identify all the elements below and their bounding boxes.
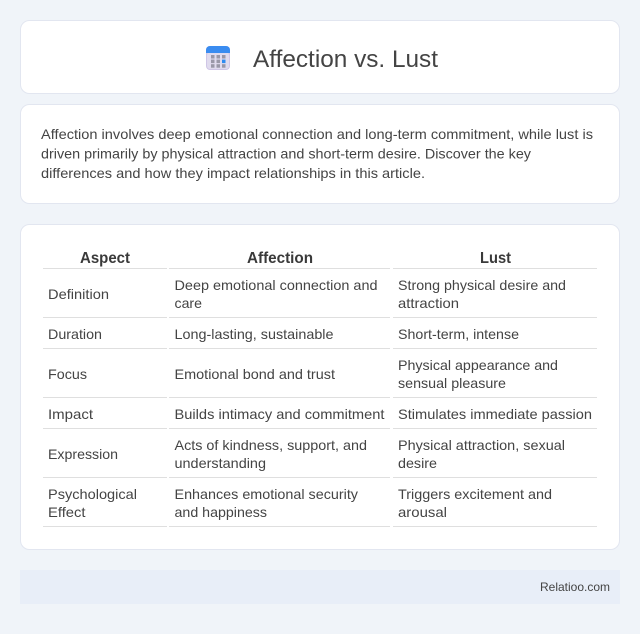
footer: [20, 570, 620, 604]
row: Focus: Focus: [48, 366, 87, 382]
text block: introduction: differences and how they impact relationships in this article.: [41, 165, 425, 181]
row: Focus: Emotional bond and trust: [174, 366, 335, 382]
row: Psychological Effect: arousal: [398, 504, 447, 520]
row: Impact: Stimulates immediate passion: [398, 406, 592, 422]
row: Definition: Strong physical desire and: [398, 277, 566, 293]
row: Expression: [48, 437, 565, 471]
text block: introduction: Affection involves deep emotional connection and long-term commitment, while lust is: [41, 126, 593, 142]
row: Psychological Effect: Effect: [48, 504, 86, 520]
panel: header: [20, 20, 620, 94]
row: Duration: Duration: [48, 326, 102, 342]
row: Duration: Long-lasting, sustainable: [174, 326, 334, 342]
panel: comparison table: [20, 224, 620, 550]
row: Expression: understanding: [174, 455, 266, 471]
row: Psychological Effect: and happiness: [174, 504, 267, 520]
row: Definition: Definition: [48, 286, 109, 302]
row: Psychological Effect: [48, 486, 552, 520]
row: Impact: Impact: [48, 406, 93, 422]
row: Expression: Expression: [48, 446, 118, 462]
table header row: Affection: [247, 250, 313, 267]
row: Duration: [48, 326, 519, 342]
icon: calendar: [206, 46, 230, 70]
table header row: Aspect: [80, 250, 131, 267]
panel: introduction: [20, 104, 620, 204]
row: Expression: Acts of kindness, support, and: [174, 437, 367, 453]
table header row: Lust: [480, 250, 512, 267]
footer: Relatioo.com: [540, 580, 610, 594]
row: Definition: attraction: [398, 295, 459, 311]
row: Definition: Deep emotional connection and: [174, 277, 378, 293]
title: Affection vs. Lust: [253, 46, 438, 73]
row: Expression: desire: [398, 455, 437, 471]
row: Focus: Physical appearance and: [398, 357, 558, 373]
table header row: [80, 250, 512, 267]
row: Impact: Builds intimacy and commitment: [174, 406, 385, 422]
row: Psychological Effect: Enhances emotional security: [174, 486, 358, 502]
row: Focus: sensual pleasure: [398, 375, 506, 391]
row: Psychological Effect: Triggers excitement and: [398, 486, 552, 502]
row: Definition: care: [174, 295, 202, 311]
text block: introduction: driven primarily by physical attraction and short-term desire. Discover the key: [41, 146, 531, 162]
row: Definition: [48, 277, 566, 311]
row: Psychological Effect: Psychological: [48, 486, 137, 502]
row: Expression: Physical attraction, sexual: [398, 437, 565, 453]
row: Duration: Short-term, intense: [398, 326, 519, 342]
row: Impact: [48, 406, 592, 422]
row: Focus: [48, 357, 558, 391]
text block: introduction: [41, 126, 593, 181]
